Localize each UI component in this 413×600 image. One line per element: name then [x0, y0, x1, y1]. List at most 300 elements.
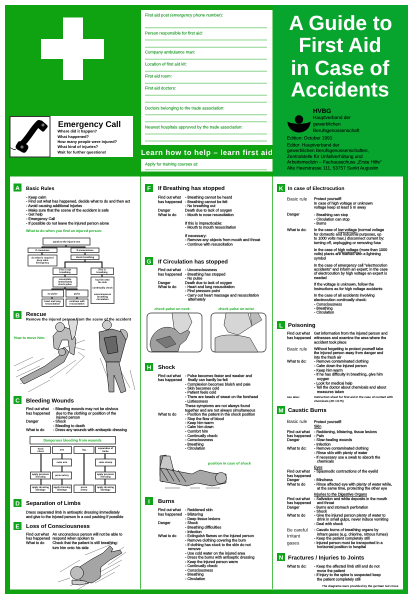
- illustration: shock position: [160, 455, 226, 488]
- section M: Caustic Burns: chemicals: [317, 460, 334, 464]
- flowchart: dangerous bleeding from wounds: apply pressure: [97, 473, 115, 476]
- section H: Shock: - Pulse becomes faster and weaker and: [185, 374, 252, 378]
- section M: Caustic Burns: Eyes: [314, 466, 323, 470]
- section E: Loss of Consciousness: has happened: [26, 536, 50, 540]
- flowchart: what to do when you find an injured person: breathing: [97, 271, 108, 274]
- section M: Caustic Burns: Injuries to the Digestive Organs: [314, 492, 367, 496]
- section I: Burns: - Remove clothing covering the burn: [185, 538, 246, 542]
- section K: In case of Electrocution: for domestic and industrial purposes, up: [314, 232, 381, 236]
- flowchart: what to do when you find an injured person: his side: [98, 281, 108, 284]
- flowchart: dangerous bleeding from wounds: limbs: [102, 450, 109, 453]
- flowchart: dangerous bleeding from wounds: head: [38, 448, 44, 450]
- section L: Poisoning: the injured person away from danger and: [314, 351, 383, 355]
- section I: Burns: - Breathing difficulties: [185, 526, 221, 530]
- section L: Poisoning: Without forgetting to protect yourself take: [314, 347, 383, 351]
- section G: If Circulation has stopped: - Breathing has stopped: [185, 272, 225, 276]
- flowchart: dangerous bleeding from wounds: bandage: [101, 489, 111, 492]
- section L: Poisoning: into the fresh air: [314, 355, 342, 359]
- section B: Rescue: [14, 311, 132, 322]
- section C: Bleeding Wounds: due to the clothing or position of the: [56, 411, 116, 415]
- flowchart: dangerous bleeding from wounds: apply dressing: [32, 486, 49, 489]
- section I: Burns: - Infection: [185, 530, 202, 534]
- section M: Caustic Burns: gases: [287, 540, 300, 546]
- flowchart: what to do when you find an injured person: immediately: [58, 280, 73, 284]
- section F: If Breathing has stopped: Find out what: [158, 196, 182, 200]
- section F: If Breathing has stopped: - Remove any objects from mouth and throat: [185, 238, 261, 242]
- section M: Caustic Burns: - Deal with shock: [314, 522, 343, 526]
- flowchart: what to do when you find an injured person: check pulse: [58, 283, 73, 286]
- flowchart: dangerous bleeding from wounds: bandage: [36, 489, 46, 492]
- section H: Shock: - Listlessness: [185, 400, 208, 404]
- section M: Caustic Burns: - Shock: [314, 509, 327, 513]
- section G: If Circulation has stopped: Find out what: [158, 268, 182, 272]
- section L: Poisoning: oxygen: [317, 377, 329, 381]
- section H: Shock: - Stop the flow of blood: [185, 417, 224, 421]
- section E: Loss of Consciousness: Check that the patient is still breathing:: [52, 541, 118, 545]
- section I: Burns: remove: [188, 547, 201, 551]
- section I: Burns: - Circulation: [185, 577, 205, 581]
- section I: Burns: Burns: [158, 499, 174, 505]
- section K: In case of Electrocution: What to do:: [287, 228, 306, 232]
- section H: Shock: finally can hardly be felt: [188, 378, 229, 382]
- section H: Shock: - Consciousness: [185, 438, 213, 442]
- section I: Burns: What to do: [158, 534, 176, 538]
- flowchart: what to do when you find an injured person: lay him onto: [95, 278, 110, 282]
- section M: Caustic Burns: Danger: [287, 438, 300, 442]
- label: check pulse on wrist: check pulse on wrist: [218, 307, 254, 311]
- flowchart: dangerous bleeding from wounds: artery: [81, 489, 88, 492]
- section M: Caustic Burns: Find out what: [287, 470, 311, 474]
- publisher block: Edition: October 1991: [287, 136, 333, 140]
- section I: Burns: Find out what: [158, 508, 182, 512]
- section A: Basic Rules: - If possible do not leave the injured person alone: [26, 221, 109, 225]
- section C: Bleeding Wounds: C: [15, 398, 20, 404]
- section E: Loss of Consciousness: What to do: [26, 541, 44, 545]
- section G: If Circulation has stopped: - No pulse: [185, 277, 202, 281]
- section M: Caustic Burns: - Rinse affected eye with plenty of water while,: [314, 482, 392, 486]
- section G: If Circulation has stopped: What to do: [158, 285, 176, 289]
- section E: Loss of Consciousness: respond when spoken to: [52, 536, 94, 540]
- section M: Caustic Burns: Find out what: [287, 497, 311, 501]
- section M: Caustic Burns: [277, 406, 392, 549]
- illustration: rescuer dragging casualty: [14, 320, 85, 392]
- panel: apply for training courses: [141, 159, 272, 172]
- section G: If Circulation has stopped: - Unconsciousness: [185, 268, 217, 272]
- section C: Bleeding Wounds: [14, 396, 127, 432]
- section F: If Breathing has stopped: has happened: [158, 200, 182, 204]
- section I: Burns: - Continually check:: [185, 564, 218, 568]
- section H: Shock: [145, 363, 258, 450]
- section L: Poisoning: - If he has difficulty in breathing, give him: [314, 373, 383, 377]
- section B: Rescue: Rescue: [26, 312, 46, 318]
- section M: Caustic Burns: Danger: [287, 505, 300, 509]
- section H: Shock: - Breathing: [185, 442, 204, 446]
- section I: Burns: - Extinguish flames on the injured person: [185, 534, 254, 538]
- flowchart: dangerous bleeding from wounds: dressing: [36, 476, 46, 478]
- flowchart: dangerous bleeding from wounds: [30, 436, 116, 492]
- section K: In case of Electrocution: In the case of emergency call "electrocution: [314, 263, 387, 267]
- flowchart: dangerous bleeding from wounds: arm: [60, 449, 64, 452]
- flowchart: what to do when you find an injured person: [28, 238, 114, 306]
- panel: first aid contact form: Nearest hospitals approved by the trade association:: [145, 124, 243, 130]
- section K: In case of Electrocution: [277, 184, 388, 315]
- section L: Poisoning: Find out what: [287, 332, 311, 336]
- emergency questions: How many people were injured?: [58, 139, 118, 144]
- section H: Shock: These symptoms are not always found: [185, 404, 250, 408]
- section I: Burns: Danger: [158, 521, 171, 525]
- flowchart: what to do when you find an injured person: no pulse: [48, 292, 58, 295]
- publisher block: gewerblichen: [313, 122, 341, 126]
- section M: Caustic Burns: - Rinse skin with plenty of water: [314, 451, 368, 455]
- publisher block: Hauptverband der: [313, 115, 351, 120]
- section A: Basic Rules: - Get help: [26, 213, 43, 217]
- illustration: unconscious person on side: [58, 544, 126, 590]
- title: Accidents: [291, 78, 389, 102]
- section K: In case of Electrocution: Protect yourself!: [314, 197, 341, 201]
- icon: HVBG logo: [288, 115, 310, 132]
- section L: Poisoning: [277, 321, 393, 403]
- flowchart: what to do when you find an injured person: heart and lung: [44, 300, 61, 303]
- section H: Shock: has happened: [158, 378, 182, 382]
- section L: Poisoning: Poisoning: [288, 322, 316, 329]
- panel: first aid contact form: Person responsible for first aid:: [145, 30, 203, 36]
- heading: Emergency Call: Emergency Call: [58, 119, 121, 129]
- section M: Caustic Burns: - Infection: [314, 442, 331, 446]
- panel: middle column: [140, 176, 273, 590]
- section A: Basic Rules: - Keep calm: [26, 195, 46, 199]
- section I: Burns: has happened: [158, 512, 182, 516]
- section H: Shock: - Patient feels cold: [185, 391, 216, 395]
- section F: If Breathing has stopped: - No breathing out: [185, 204, 216, 208]
- flowchart: what to do when you find an injured person: resuscitation: [45, 303, 60, 306]
- section K: In case of Electrocution: In case of Electrocution: [288, 186, 344, 192]
- section H: Shock: together and are not always simultaneous: [185, 408, 255, 412]
- flowchart: what to do when you find an injured person: continue with: [69, 300, 85, 303]
- section F: If Breathing has stopped: Danger: [158, 208, 171, 212]
- section D: Separation of Limbs: and give to the injured person in a cool packing if possible: [26, 515, 123, 519]
- section K: In case of Electrocution: In the case of all accidents involving: [314, 294, 375, 298]
- section A: Basic Rules: What to do when you find an injured person:: [26, 229, 102, 233]
- panel: first aid contact form: Doctors belonging to the trade association:: [145, 105, 224, 110]
- section K: In case of Electrocution: - Breathing: [314, 306, 333, 310]
- section M: Caustic Burns: - Caustic burns of breathing organs by: [314, 528, 378, 532]
- flowchart: what to do when you find an injured person: do what is required: [32, 256, 54, 260]
- section G: If Circulation has stopped: - Heart and lung resuscitation: [185, 285, 235, 289]
- section H: Shock: - Calm him down: [185, 425, 213, 429]
- section F: If Breathing has stopped: - Mouth to mouth resuscitation: [185, 226, 236, 230]
- section M: Caustic Burns: - Injured person must be transported in a: [314, 541, 383, 545]
- heading: learn how to help: Learn how to help – learn first aid: [141, 148, 273, 157]
- section C: Bleeding Wounds: What to do: [26, 428, 44, 432]
- section F: If Breathing has stopped: [145, 184, 261, 246]
- section N: Fractures / Injuries to Joints: [277, 553, 399, 588]
- section M: Caustic Burns: What to do: [287, 482, 305, 486]
- flowchart: what to do when you find an injured person: check breathing: [76, 256, 95, 259]
- icon: telephone handset: [10, 116, 50, 157]
- section A: Basic Rules: - Emergency Call: [26, 217, 55, 221]
- section H: Shock: - Keep him warm: [185, 421, 214, 425]
- section K: In case of Electrocution: - Circulation can stop: [314, 217, 350, 221]
- publisher block: HVBG: [313, 108, 331, 115]
- flowchart: dangerous bleeding from wounds: Dangerous bleeding from wounds: [43, 438, 102, 442]
- section H: Shock: Find out what: [158, 374, 182, 378]
- section H: Shock: What to do: [158, 412, 176, 416]
- section I: Burns: I: [148, 498, 150, 506]
- section B: Rescue: B: [15, 312, 20, 320]
- section F: If Breathing has stopped: What to do: [158, 213, 176, 217]
- section M: Caustic Burns: What to do:: [287, 447, 306, 451]
- section I: Burns: - If clothing has stuck to the skin do not: [185, 543, 252, 547]
- section I: Burns: [145, 497, 254, 581]
- section M: Caustic Burns: Basic rule: [287, 419, 308, 424]
- section K: In case of Electrocution: needed: [314, 276, 327, 280]
- flowchart: what to do when you find an injured person: circulation: [96, 298, 109, 301]
- section L: Poisoning: accident took place: [314, 340, 347, 344]
- emergency questions: [58, 128, 118, 154]
- section M: Caustic Burns: Danger: [287, 478, 300, 482]
- section M: Caustic Burns: has happened: [287, 474, 311, 478]
- section H: Shock: - There are beads of sweat on the forehead: [185, 395, 258, 399]
- emergency call panel: [10, 116, 133, 157]
- section D: Separation of Limbs: Separation of Limbs: [26, 500, 81, 507]
- section K: In case of Electrocution: - Circulation: [314, 311, 334, 315]
- section H: Shock: - Continually check:: [185, 434, 218, 438]
- label: position in case of shock: position in case of shock: [208, 462, 251, 466]
- section G: If Circulation has stopped: alternately: [188, 298, 206, 302]
- panel: first aid contact form: Company ambulance man:: [145, 50, 195, 54]
- section I: Burns: - Deep tissue lesions: [185, 517, 220, 521]
- section F: If Breathing has stopped: - Continue with resuscitation: [185, 242, 233, 246]
- section I: Burns: - Blistering: [185, 512, 203, 516]
- section N: Fractures / Injuries to Joints: Fractures / Injuries to Joints: [288, 554, 364, 562]
- section A: Basic Rules: [14, 184, 131, 233]
- section M: Caustic Burns: Irritant: [287, 534, 301, 538]
- section K: In case of Electrocution: - Consciousness: [314, 302, 342, 306]
- illustration: check pulse on wrist: [211, 313, 266, 352]
- section L: Poisoning: measures taken: [317, 390, 344, 394]
- flowchart: dangerous bleeding from wounds: bandage: [57, 489, 68, 492]
- publisher block: Berufsgenossenschaft: [313, 128, 360, 133]
- section M: Caustic Burns: M: [278, 408, 284, 414]
- section M: Caustic Burns: - Remove contaminated clothing: [314, 447, 368, 451]
- section M: Caustic Burns: What to do: [287, 513, 305, 517]
- section F: If Breathing has stopped: - Breathing cannot be felt: [185, 200, 228, 204]
- section L: Poisoning: - Calm down the injured person: [314, 364, 367, 368]
- section M: Caustic Burns: Protect yourself!: [314, 420, 341, 424]
- section K: In case of Electrocution: Danger: [287, 213, 300, 217]
- section B: Rescue: Remove the injured person from the scene of the accident: [26, 318, 132, 322]
- panel: first aid contact form: First aid post (emergency phone number):: [145, 12, 223, 18]
- emergency questions: What kind of injuries?: [58, 144, 99, 149]
- flowchart: what to do when you find an injured person: if unconscious: [77, 249, 94, 252]
- section N: Fractures / Injuries to Joints: N: [279, 554, 283, 562]
- section L: Poisoning: see also:: [287, 395, 300, 399]
- flowchart: what to do when you find an injured person: breathing: [60, 271, 71, 274]
- section F: If Breathing has stopped: F: [147, 186, 151, 192]
- section E: Loss of Consciousness: E: [15, 524, 20, 530]
- section K: In case of Electrocution: instructions as for high voltage accidents: [314, 287, 382, 291]
- section C: Bleeding Wounds: has happened: [26, 411, 50, 415]
- flowchart: dangerous bleeding from wounds: raise stump: [99, 461, 113, 464]
- section H: Shock: - Skin becomes cold: [185, 386, 219, 390]
- flowchart: dangerous bleeding from wounds: chest: [37, 450, 44, 453]
- section E: Loss of Consciousness: [14, 522, 122, 550]
- section L: Poisoning: L: [279, 322, 283, 330]
- flowchart: what to do when you find an injured person: pulse: [74, 292, 81, 295]
- section K: In case of Electrocution: In the case of high voltage (more than 1000: [314, 248, 387, 252]
- section C: Bleeding Wounds: - Bleeding wounds may not be obvious: [53, 407, 118, 411]
- first aid cross icon: [41, 18, 104, 80]
- section N: Fractures / Injuries to Joints: What to do:: [287, 564, 306, 568]
- publisher block: Alte Heerstrasse 111, 53757 Sankt Augustin: [287, 166, 379, 170]
- title: [289, 12, 392, 102]
- section A: Basic Rules: Basic Rules: [26, 186, 55, 192]
- flowchart: what to do when you find an injured person: Emergency: [36, 262, 50, 265]
- flowchart: dangerous bleeding from wounds: apply dressing: [97, 486, 114, 489]
- section G: If Circulation has stopped: [145, 257, 259, 302]
- section F: If Breathing has stopped: If necessary:: [185, 234, 207, 238]
- section F: If Breathing has stopped: Death due to lack of oxygen: [185, 208, 232, 212]
- section L: Poisoning: - Keep him warm: [314, 368, 343, 372]
- section E: Loss of Consciousness: An unconscious person will not be able to: [52, 532, 122, 536]
- section N: Fractures / Injuries to Joints: - Keep the affected limb still and do not: [314, 564, 381, 568]
- section M: Caustic Burns: - Pain: [314, 434, 324, 438]
- section M: Caustic Burns: Skin: [314, 424, 321, 428]
- section I: Burns: - Reddened skin: [185, 508, 213, 512]
- emergency questions: What happened?: [58, 134, 89, 139]
- panel: right column: [273, 176, 403, 590]
- section M: Caustic Burns: Caustic Burns: [288, 407, 327, 414]
- publisher block: Editor: Hauptverband der: [287, 142, 340, 148]
- section L: Poisoning: - Tell the doctor about chemicals and about: [314, 386, 387, 390]
- flowchart: dangerous bleeding from wounds: dressing: [101, 476, 111, 478]
- section D: Separation of Limbs: [14, 499, 123, 519]
- section K: In case of Electrocution: In case of high voltage or unknown: [314, 202, 373, 206]
- section D: Separation of Limbs: D: [15, 500, 20, 508]
- section K: In case of Electrocution: of electrocution by high voltage an expert is: [314, 272, 387, 276]
- section L: Poisoning: Instruction sheet for first aid in the case of contact with: [314, 395, 393, 399]
- section G: If Circulation has stopped: has happened: [158, 272, 182, 276]
- flowchart: what to do when you find an injured person: if he is: [98, 268, 106, 272]
- panel: first aid contact form: First aid room:: [145, 74, 172, 78]
- flowchart: what to do when you find an injured person: breathing: [97, 296, 108, 298]
- section N: Fractures / Injuries to Joints: - If injury to the spine is suspected keep: [314, 573, 381, 577]
- section G: If Circulation has stopped: Danger: [158, 281, 171, 285]
- section M: Caustic Burns: - Blindness: [314, 478, 333, 482]
- flowchart: dangerous bleeding from wounds: press artery: [55, 474, 70, 477]
- section I: Burns: - Keep the injured person warm: [185, 560, 238, 564]
- flowchart: dangerous bleeding from wounds: apply dressing: [54, 486, 71, 489]
- section G: If Circulation has stopped: G: [147, 258, 152, 266]
- title: A Guide to: [289, 12, 392, 35]
- flowchart: dangerous bleeding from wounds: raise arm: [57, 461, 67, 464]
- section M: Caustic Burns: and throat: [317, 501, 335, 505]
- section M: Caustic Burns: - Spasmodic contractions of the eyelid: [314, 470, 378, 474]
- section H: Shock: H: [147, 364, 151, 372]
- section I: Burns: - Use cold water on the injured area: [185, 551, 246, 555]
- publisher block: gewerblichen Berufsgenossenschaften,: [287, 148, 369, 153]
- section K: In case of Electrocution: voltage keep at least 5 m away: [314, 206, 366, 210]
- publisher block: Arbeitsmedizin – Fachausschuss „Erste Hilfe“: [287, 160, 382, 165]
- section K: In case of Electrocution: symbol: [314, 256, 326, 260]
- section A: Basic Rules: A: [15, 185, 20, 192]
- section H: Shock: - Comfort him: [185, 430, 208, 434]
- section M: Caustic Burns: - If necessary use a swab to absorb the: [314, 455, 380, 459]
- illustration: rescuer carrying casualty: [99, 320, 135, 393]
- flowchart: what to do when you find an injured person: resuscitation: [70, 303, 85, 306]
- panel: first aid contact form: First aid doctors:: [145, 86, 176, 90]
- section K: In case of Electrocution: volts) plants are marked with a lightning: [314, 252, 381, 256]
- section K: In case of Electrocution: - Breathing can stop: [314, 213, 348, 217]
- panel: first aid contact form: [141, 10, 272, 145]
- illustration: check pulse on neck: [147, 313, 202, 352]
- section L: Poisoning: Get information from the injured person and: [314, 332, 387, 336]
- flowchart: what to do when you find an injured person: keep calm: [37, 259, 48, 262]
- section M: Caustic Burns: - Salivation and white deposits in the mouth: [314, 497, 387, 501]
- section K: In case of Electrocution: turning off, unplugging or removing fuse: [314, 241, 381, 245]
- emergency questions: Where did it happen?: [58, 128, 98, 134]
- label: check pulse on neck: check pulse on neck: [154, 307, 190, 311]
- section I: Burns: - Breathing: [185, 572, 204, 576]
- section F: If Breathing has stopped: If this is impracticable:: [185, 221, 222, 225]
- section G: If Circulation has stopped: - Carry out heart massage and resuscitation: [185, 293, 259, 297]
- section L: Poisoning: Basic rule: [287, 346, 308, 351]
- flowchart: what to do when you find an injured person: consciousness: [94, 293, 112, 296]
- publisher block: [287, 108, 382, 170]
- section F: If Breathing has stopped: - Mouth to nose resuscitation: [185, 213, 234, 217]
- label: how to move him: How to move him:: [14, 336, 45, 340]
- section M: Caustic Burns: - Keep the patient completely still: [314, 536, 370, 540]
- section C: Bleeding Wounds: Bleeding Wounds: [26, 398, 74, 404]
- flowchart: what to do when you find an injured person: if conscious: [36, 249, 50, 252]
- section M: Caustic Burns: at the same time, protecting the other eye: [317, 486, 387, 490]
- section K: In case of Electrocution: accidents" and inform an expert; in the case: [314, 267, 388, 271]
- section M: Caustic Burns: has happened: [287, 434, 311, 438]
- section E: Loss of Consciousness: Find out what: [26, 532, 50, 536]
- publisher block: Zentralstelle für Unfallverhütung und: [287, 154, 363, 159]
- section A: Basic Rules: - Avoid causing additional injuries: [26, 204, 82, 208]
- flowchart: dangerous bleeding from wounds: separation of: [98, 447, 113, 450]
- section G: If Circulation has stopped: If Circulation has stopped: [158, 258, 228, 265]
- flowchart: dangerous bleeding from wounds: leg: [82, 449, 86, 452]
- flowchart: what to do when you find an injured person: continually check: [92, 286, 113, 290]
- section C: Bleeding Wounds: - Bleeding to death: [53, 424, 85, 428]
- title: First Aid: [299, 34, 381, 57]
- section M: Caustic Burns: - Slow-healing wounds: [314, 438, 352, 442]
- section F: If Breathing has stopped: - Breathing cannot be heard: [185, 196, 232, 200]
- section G: If Circulation has stopped: - Find pressure point: [185, 289, 221, 293]
- section I: Burns: - Shock: [185, 521, 198, 525]
- flowchart: what to do when you find an injured person: if he is not: [59, 268, 71, 272]
- section K: In case of Electrocution: K: [279, 186, 284, 192]
- section D: Separation of Limbs: Dress separated limb in antiseptic dressing immediately: [26, 510, 120, 514]
- flowchart: what to do when you find an injured person: resuscitate: [59, 278, 72, 281]
- section K: In case of Electrocution: - Burns: [314, 222, 326, 226]
- panel: apply for training courses: Apply for training courses at:: [145, 162, 198, 166]
- section K: In case of Electrocution: If the voltage is unknown, follow the: [314, 283, 374, 287]
- section K: In case of Electrocution: electrocution continually check:: [314, 298, 367, 302]
- section H: Shock: - Circulation: [185, 446, 205, 450]
- panel: first aid contact form: Location of first aid kit:: [145, 62, 187, 66]
- section F: If Breathing has stopped: If Breathing has stopped: [158, 185, 225, 192]
- section C: Bleeding Wounds: - Dress any wounds with antiseptic dressing: [53, 428, 127, 432]
- section A: Basic Rules: - Find out what has happened, decide what to do and then act: [26, 200, 131, 204]
- section N: Fractures / Injuries to Joints: The diagrams were provided by the german red cross: [322, 584, 399, 588]
- section M: Caustic Burns: - Give the injured person plenty of water to: [314, 513, 386, 517]
- section C: Bleeding Wounds: injured person: [56, 415, 80, 419]
- section M: Caustic Burns: Find out what: [287, 430, 311, 434]
- section M: Caustic Burns: irritant gases (e.g. chlorine, nitrous fumes): [317, 532, 389, 536]
